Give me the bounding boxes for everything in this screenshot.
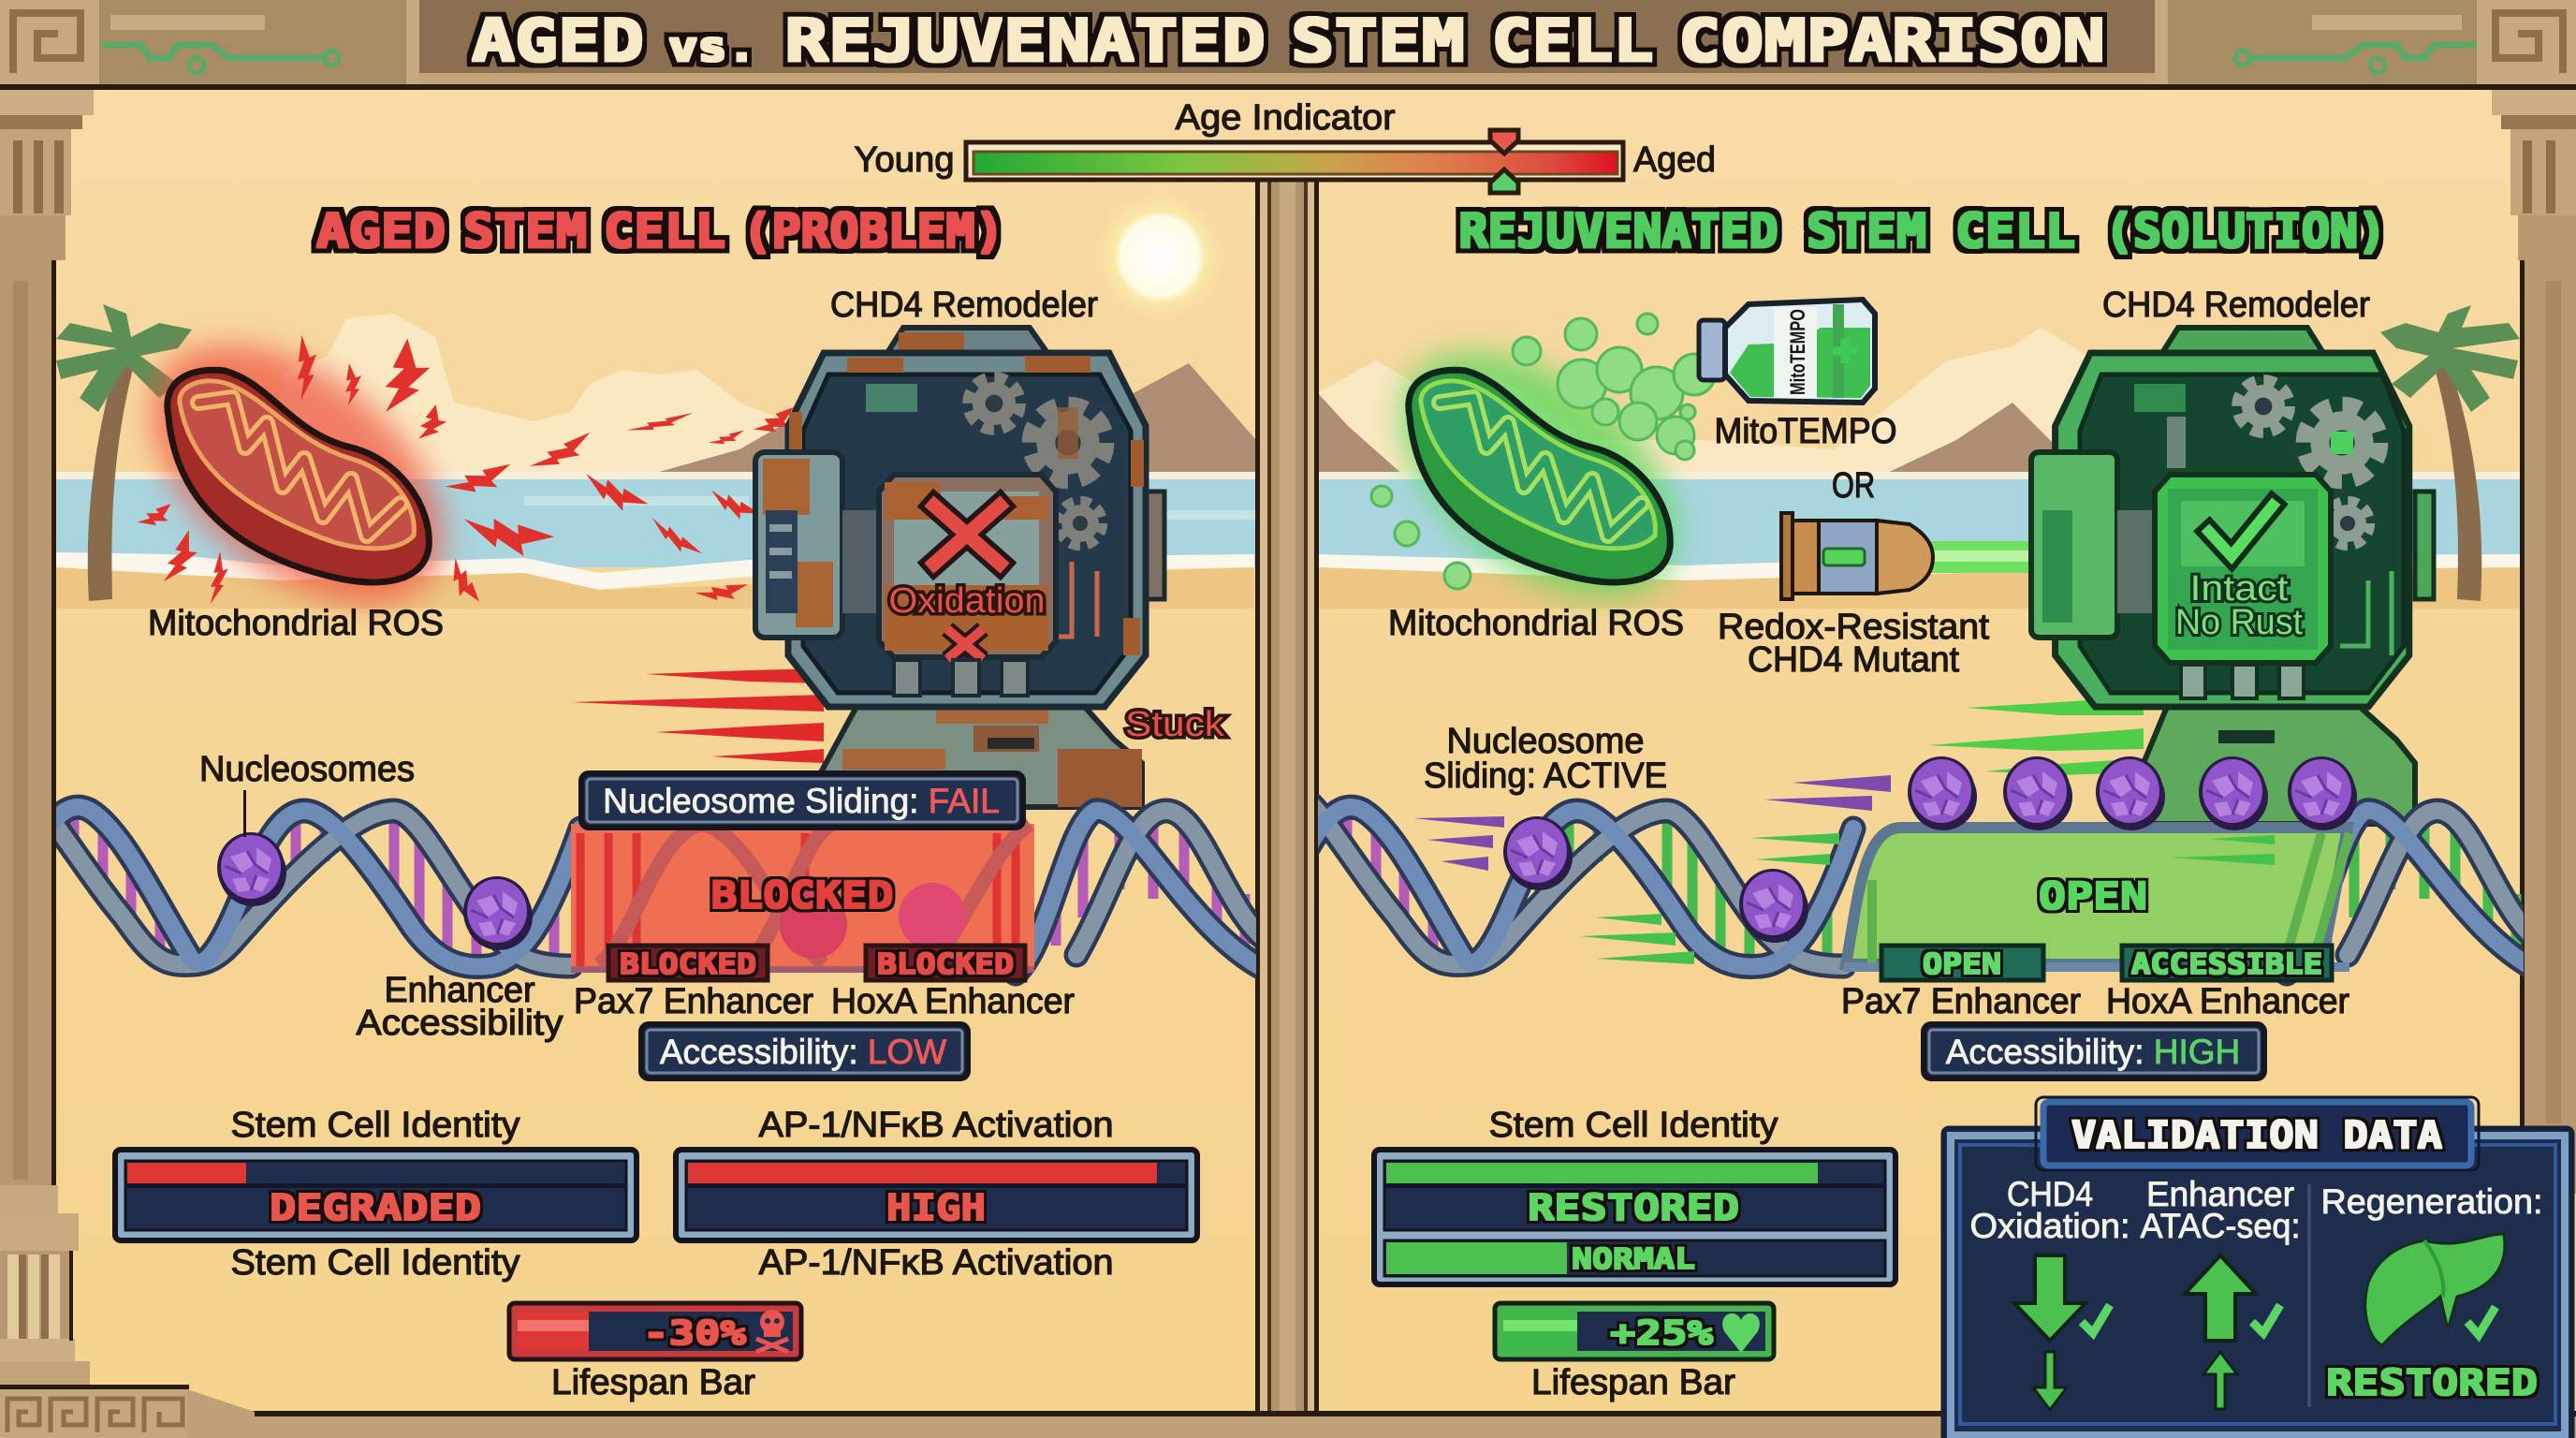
label: OR: OR — [1832, 466, 1875, 506]
icon: greek key — [7, 1399, 183, 1432]
label: blocked: BLOCKED — [711, 874, 893, 917]
callout: accessibility low: Accessibility: LOW — [660, 1033, 946, 1071]
callout: sliding fail: Nucleosome Sliding: FAIL — [603, 782, 1000, 820]
gauge: AP-1 high — [676, 1150, 1197, 1240]
icon: heart — [1722, 1313, 1760, 1353]
nucleosome: enhancer rejuvenated — [1739, 869, 1808, 943]
corner ornaments — [0, 0, 2576, 84]
nucleosome: left rejuvenated — [1503, 816, 1573, 890]
callout: accessibility low — [641, 1024, 968, 1078]
heading: rejuvenated: REJUVENATED — [1458, 204, 1778, 258]
icon: liver — [2365, 1234, 2505, 1345]
label: stem cell identity rejuvenated: Stem Cell Identity — [1488, 1106, 1778, 1145]
young label: Young — [854, 140, 955, 180]
icon: MitoTEMPO bottle — [1699, 300, 1875, 403]
label: hoxa: HoxA Enhancer — [831, 982, 1075, 1021]
machine base — [821, 697, 1142, 807]
label: lifespan aged: Lifespan Bar — [551, 1363, 755, 1402]
label: enhancer accessibility — [356, 971, 564, 1043]
title: REJUVENATED — [784, 7, 1266, 75]
title: CELL — [1492, 7, 1653, 75]
heading: aged: STEM — [463, 204, 587, 258]
lifespan bar rejuvenated — [1495, 1303, 1774, 1359]
label: CHD4 rejuvenated: CHD4 Remodeler — [2102, 286, 2370, 325]
arrow: atac up — [2185, 1255, 2256, 1341]
sea — [56, 474, 1256, 567]
arrow: atac small up — [2203, 1352, 2237, 1409]
gauge: stem cell identity degraded — [115, 1150, 637, 1240]
palm tree left — [56, 304, 192, 601]
motion lines: green — [1580, 833, 2275, 964]
arrow: oxidation small down — [2033, 1352, 2067, 1410]
ROS lightning bolts — [136, 335, 801, 609]
healing particles — [1371, 314, 1736, 589]
side panel — [755, 452, 880, 638]
gauge: stem cell identity restored — [1374, 1150, 1895, 1284]
right column — [2525, 89, 2576, 1194]
title — [472, 7, 2105, 75]
mountains right — [1319, 394, 1400, 472]
age indicator — [854, 98, 1716, 193]
open chromatin region — [1844, 828, 2349, 972]
divider — [2307, 1184, 2311, 1407]
tag: blocked pax7: BLOCKED — [620, 948, 756, 981]
lifespan bar aged: -30% — [643, 1314, 746, 1353]
label: AP-1 top: AP-1/NFκB Activation — [758, 1106, 1114, 1145]
nucleosome: enhancer — [463, 876, 533, 950]
validation title tab: VALIDATION DATA — [2071, 1114, 2442, 1157]
icon: red X — [934, 506, 1000, 564]
chd4 oxidation heading: Oxidation: — [1969, 1207, 2130, 1245]
chd4 oxidation heading — [1969, 1175, 2130, 1245]
label: nucleosomes — [199, 750, 415, 837]
label: pax7 rejuvenated: Pax7 Enhancer — [1841, 982, 2081, 1021]
dna: rejuvenated helix — [1301, 796, 2544, 974]
label: pax7: Pax7 Enhancer — [574, 982, 813, 1021]
normal sub-bar: NORMAL — [1572, 1243, 1695, 1276]
marker: aged pointer — [1490, 130, 1518, 154]
label: AP-1 bottom: AP-1/NFκB Activation — [758, 1243, 1114, 1283]
label: stem cell identity top aged: Stem Cell Identity — [230, 1106, 520, 1145]
heading: rejuvenated: CELL — [1955, 204, 2075, 258]
validation title tab — [2036, 1097, 2479, 1170]
label: oxidation: Oxidation — [889, 581, 1045, 621]
panel: rejuvenated beach scene — [1318, 305, 2524, 609]
normal sub-bar — [1384, 1240, 1885, 1276]
enhancer atac heading — [2140, 1175, 2301, 1245]
label: mitochondrial ROS aged: Mitochondrial ROS — [148, 604, 444, 643]
circuit decoration left — [101, 15, 339, 73]
check atac — [2252, 1305, 2280, 1333]
tag: open pax7: OPEN — [1923, 948, 2001, 981]
blocked nucleosomes — [780, 891, 847, 959]
title: COMPARISON — [1678, 7, 2105, 75]
mitochondrion: aged — [105, 293, 490, 656]
label: redox-resistant: CHD4 Mutant — [1748, 640, 1959, 680]
bottle label: MitoTEMPO — [1786, 309, 1809, 395]
title: AGED — [472, 7, 644, 75]
clouds right — [1318, 328, 2125, 477]
machine: aged CHD4 remodeler — [755, 286, 1164, 807]
label: redox-resistant — [1718, 608, 1989, 680]
check regeneration — [2467, 1307, 2496, 1335]
top banner — [0, 0, 2576, 90]
gears — [2239, 382, 2378, 544]
tag: blocked hoxa — [866, 946, 1025, 981]
blocked region — [571, 824, 1034, 973]
heading: rejuvenated — [1458, 204, 2386, 258]
palm tree right — [2380, 305, 2520, 601]
sea right — [1318, 474, 2524, 567]
circuit decoration right — [2235, 15, 2477, 73]
speed lines: red — [571, 668, 824, 763]
gradient bar — [966, 142, 1623, 180]
label: stem cell identity bottom aged: Stem Cell Identity — [230, 1243, 520, 1283]
mitochondrion: rejuvenated — [1355, 303, 1722, 646]
gauge: stem cell identity degraded: DEGRADED — [270, 1187, 481, 1228]
label: nucleosome sliding active: Nucleosome — [1447, 722, 1644, 761]
icon: skull — [756, 1310, 788, 1352]
sliding nucleosomes — [1908, 756, 2357, 830]
callout: sliding fail — [581, 773, 1023, 828]
center plate — [879, 475, 1056, 657]
label: stuck: Stuck — [1125, 705, 1225, 744]
label: CHD4 aged: CHD4 Remodeler — [830, 286, 1098, 325]
label: open: OPEN — [2039, 875, 2147, 918]
tag: blocked hoxa: BLOCKED — [877, 948, 1014, 981]
motion lines: purple — [1413, 775, 1891, 871]
label: lifespan rejuvenated: Lifespan Bar — [1531, 1363, 1735, 1402]
speed lines: green — [1928, 697, 2144, 775]
icon: redox-resistant bullet — [1781, 513, 1933, 599]
machine: rejuvenated CHD4 remodeler — [2031, 286, 2434, 824]
heading: rejuvenated: STEM — [1807, 204, 1926, 258]
label: enhancer accessibility: Accessibility — [356, 1004, 564, 1043]
title: STEM — [1291, 7, 1465, 75]
heading: aged: (PROBLEM) — [743, 204, 1003, 258]
restored label: RESTORED — [2326, 1362, 2538, 1403]
nucleosome: left — [217, 832, 286, 906]
dna: aged helix — [28, 796, 1273, 974]
label: mitochondrial ROS rejuvenated: Mitochondrial ROS — [1388, 604, 1684, 643]
label: redox-resistant: Redox-Resistant — [1718, 608, 1989, 647]
label: nucleosomes: Nucleosomes — [199, 750, 415, 789]
age indicator label: Age Indicator — [1176, 98, 1396, 138]
enhancer atac heading: Enhancer — [2146, 1175, 2294, 1213]
arrow: oxidation down — [2014, 1255, 2086, 1341]
label: enhancer accessibility: Enhancer — [384, 971, 535, 1010]
icon: small red X — [947, 629, 983, 659]
gears — [970, 379, 1104, 544]
clouds — [281, 314, 805, 477]
gauge: AP-1 high: HIGH — [886, 1187, 986, 1228]
label: intact no rust: No Rust — [2175, 603, 2303, 642]
green beam — [1928, 541, 2039, 573]
gauge: stem cell identity restored: RESTORED — [1528, 1187, 1739, 1228]
left column — [0, 89, 52, 1194]
machine base — [2144, 697, 2415, 824]
aged label: Aged — [1633, 140, 1716, 180]
tag: open pax7 — [1881, 946, 2043, 981]
mountains — [646, 363, 1256, 476]
label: MitoTEMPO: MitoTEMPO — [1715, 412, 1896, 451]
label: nucleosome sliding active — [1424, 722, 1667, 796]
heading: aged — [316, 204, 1003, 258]
pistons — [2181, 665, 2304, 698]
center plate — [2155, 475, 2331, 663]
regeneration heading: Regeneration: — [2321, 1182, 2542, 1221]
label: hoxa rejuvenated: HoxA Enhancer — [2106, 982, 2349, 1021]
tag: accessible hoxa: ACCESSIBLE — [2131, 948, 2322, 981]
callout: accessibility high — [1924, 1024, 2264, 1078]
marker: young pointer — [1490, 169, 1518, 193]
callout: accessibility high: Accessibility: HIGH — [1946, 1033, 2240, 1071]
lifespan bar aged — [509, 1303, 801, 1359]
panel: aged beach scene — [56, 185, 1256, 609]
label: intact no rust — [2175, 569, 2303, 642]
heading: rejuvenated: (SOLUTION) — [2105, 204, 2386, 258]
tag: blocked pax7 — [608, 946, 768, 981]
label: intact no rust: Intact — [2190, 569, 2289, 609]
pistons — [894, 660, 1028, 696]
lifespan bar rejuvenated: +25% — [1610, 1314, 1713, 1353]
enhancer atac heading: ATAC-seq: — [2140, 1207, 2301, 1245]
panel: validation data — [1943, 1097, 2572, 1438]
heading: aged: AGED — [316, 204, 446, 258]
sun — [1106, 204, 1213, 311]
heading: aged: CELL — [604, 204, 725, 258]
label: nucleosome sliding active: Sliding: ACTIVE — [1424, 756, 1667, 796]
title: vs. — [668, 23, 756, 71]
icon: green check — [2209, 506, 2273, 556]
side panel — [2031, 452, 2155, 638]
chd4 oxidation heading: CHD4 — [2007, 1175, 2093, 1213]
check oxidation — [2082, 1305, 2110, 1333]
